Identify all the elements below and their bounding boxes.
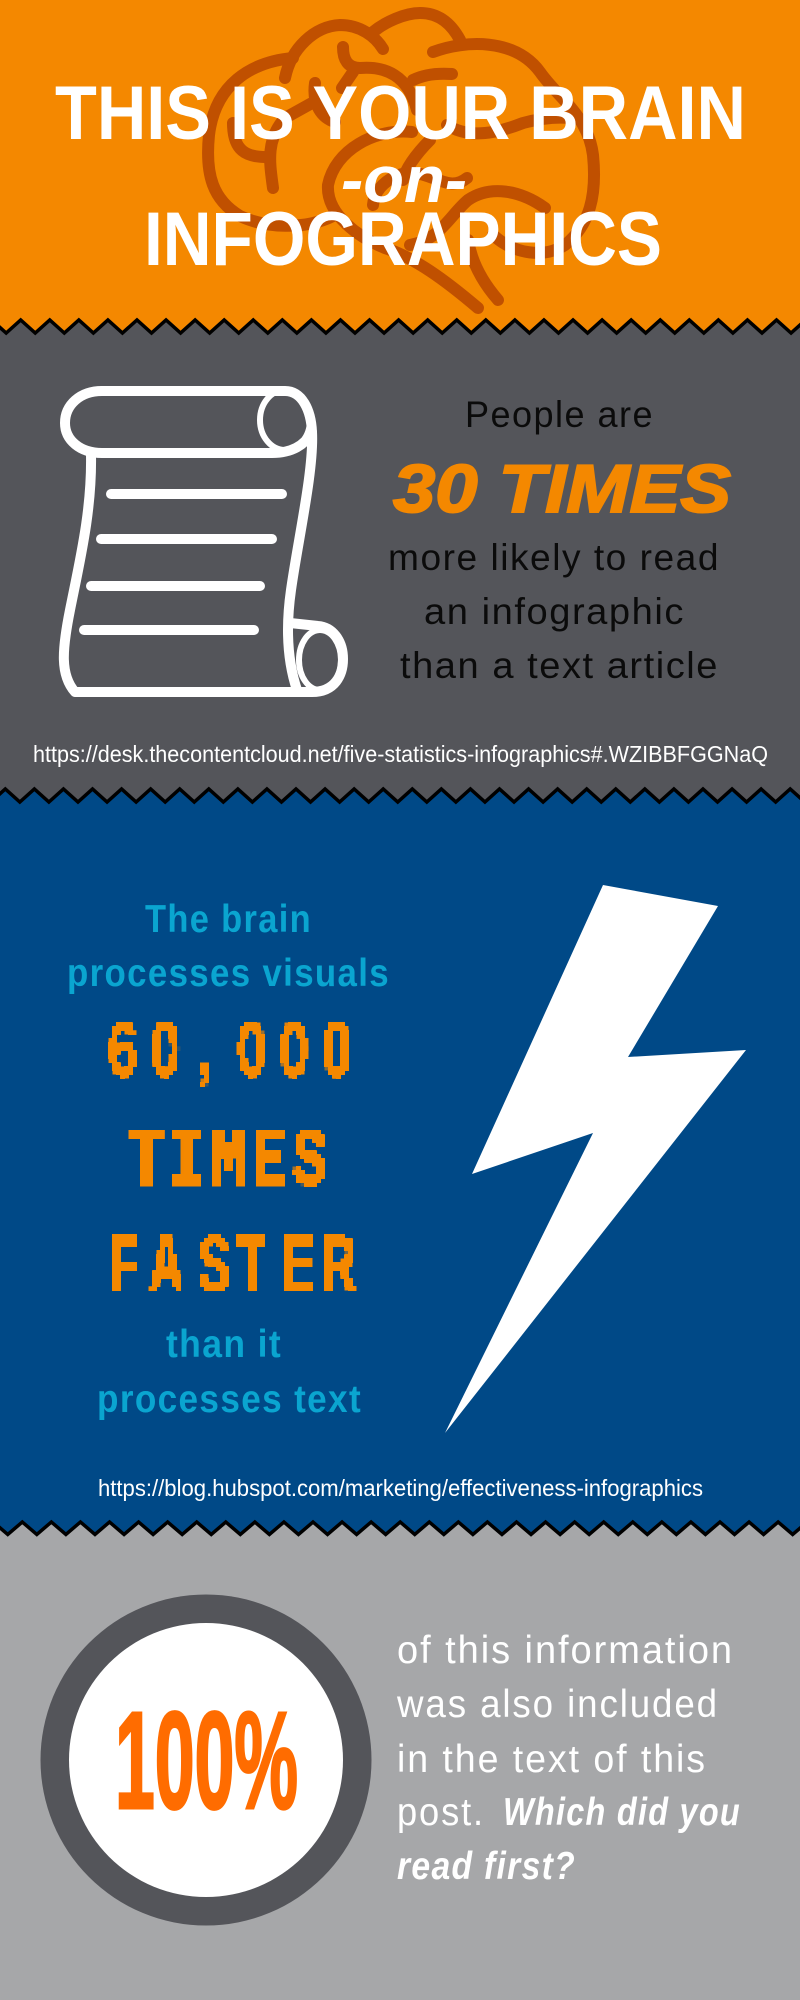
text: source link one: https://desk.thecontentcloud.net/five-statistics-infographics#.WZIBBFGGNaQ xyxy=(33,741,768,767)
text: than a text article: than a text article xyxy=(400,645,719,686)
text: an infographic: an infographic xyxy=(424,591,685,632)
text: TIMES pixel word: TIMES xyxy=(129,1116,333,1209)
text: the brain: The brain xyxy=(145,898,312,941)
icon: brain outline xyxy=(208,13,594,308)
text: processes text: processes text xyxy=(97,1378,362,1421)
text: which did you: Which did you xyxy=(503,1791,741,1834)
text: source link two: https://blog.hubspot.com/marketing/effectiveness-infographics xyxy=(98,1475,703,1501)
icon: paper scroll xyxy=(64,390,343,692)
icon: lightning bolt xyxy=(445,885,746,1433)
text: people are: People are xyxy=(465,394,654,435)
heading: title line 2: -on- xyxy=(341,142,467,216)
text: than it: than it xyxy=(166,1323,282,1366)
panel: grey conclusion xyxy=(0,1522,800,2000)
heading: title line 1: THIS IS YOUR BRAIN xyxy=(55,71,746,156)
icon: ring with 100 percent xyxy=(40,1594,372,1926)
text: read first: read first? xyxy=(397,1845,576,1888)
panel: dark grey statistic about reading xyxy=(0,320,800,830)
text: 60,000 pixel number: 60,000 xyxy=(108,1007,352,1094)
heading: title line 3: INFOGRAPHICS xyxy=(144,197,662,282)
text: processes visuals: processes visuals xyxy=(67,952,390,995)
text: post: post. xyxy=(397,1791,485,1834)
text: of this information: of this information xyxy=(397,1629,734,1672)
text: was also included: was also included xyxy=(396,1683,719,1726)
panel: orange title header xyxy=(0,0,800,340)
text: FASTER pixel word: FASTER xyxy=(110,1218,356,1308)
panel: blue statistic about visual processing xyxy=(0,789,800,1560)
text: 30 times highlight: 30 TIMES xyxy=(393,451,731,527)
text: 100%: 100% xyxy=(115,1684,298,1838)
text: in the text of this: in the text of this xyxy=(397,1738,707,1781)
text: more likely to read: more likely to read xyxy=(388,537,720,578)
